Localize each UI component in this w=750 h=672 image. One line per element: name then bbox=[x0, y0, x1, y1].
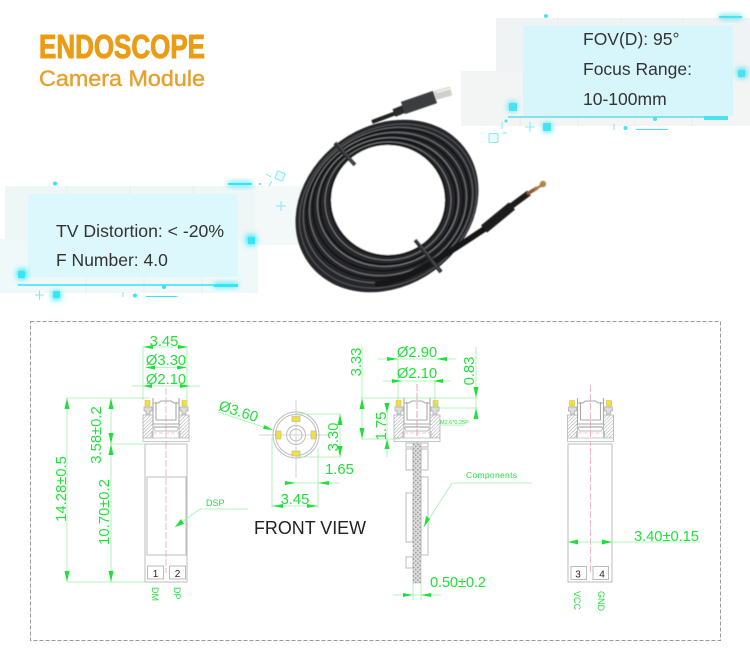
dim label 3.33: 3.33 bbox=[349, 348, 365, 376]
pad 4 bbox=[593, 566, 608, 580]
dim label 3.58: 3.58±0.2 bbox=[89, 406, 105, 464]
label DSP: DSP bbox=[206, 498, 225, 508]
label: FRONT VIEW: FRONT VIEW bbox=[254, 518, 366, 538]
pad 1: 1 bbox=[153, 569, 159, 580]
title: ENDOSCOPE: ENDOSCOPE bbox=[39, 28, 205, 65]
dim label Ø2.90: Ø2.90 bbox=[397, 345, 437, 361]
dim label 1.65: 1.65 bbox=[325, 462, 354, 478]
text: range value: 10-100mm bbox=[583, 89, 667, 109]
title bbox=[39, 28, 205, 91]
panel: lens specs right bbox=[461, 14, 750, 142]
dim label 3.45: 3.45 bbox=[281, 492, 309, 508]
drawing: PCB side view bbox=[349, 345, 532, 600]
dim label 3.30: 3.30 bbox=[326, 423, 342, 451]
text: F Number: F Number: 4.0 bbox=[56, 250, 168, 270]
label GND: GND bbox=[596, 591, 606, 612]
dim label 10.70: 10.70±0.2 bbox=[97, 479, 113, 545]
LEDs bbox=[276, 416, 316, 456]
pad 1 bbox=[148, 566, 164, 580]
pad 3: 3 bbox=[575, 570, 581, 580]
panel: dimension drawing frame bbox=[30, 322, 720, 640]
text: Focus Range: Focus Range: bbox=[583, 59, 692, 79]
subtitle: Camera Module: Camera Module bbox=[39, 66, 205, 91]
dim label Ø2.10: Ø2.10 bbox=[146, 372, 186, 388]
label DP: DP bbox=[172, 587, 182, 600]
drawing: right side view bbox=[568, 385, 700, 612]
drawing: left side view bbox=[54, 334, 248, 601]
dim label 0.50: 0.50±0.2 bbox=[430, 575, 486, 591]
pad 2: 2 bbox=[175, 569, 181, 580]
product image: cable coil bbox=[262, 84, 546, 328]
dim label 1.75: 1.75 bbox=[374, 412, 390, 440]
pad 4: 4 bbox=[599, 570, 605, 580]
pad 3 bbox=[571, 566, 586, 580]
pad 2 bbox=[170, 566, 186, 580]
label Components: Components bbox=[466, 470, 517, 480]
text: TV Distortion: TV Distortion: < -20% bbox=[56, 221, 224, 241]
dim label Ø3.30: Ø3.30 bbox=[146, 353, 186, 369]
dim label 3.45: 3.45 bbox=[150, 334, 178, 350]
dim label 14.28: 14.28±0.5 bbox=[54, 456, 70, 522]
label VCC: VCC bbox=[572, 591, 582, 611]
dim label Ø2.10: Ø2.10 bbox=[397, 366, 437, 382]
panel: lens specs left bbox=[0, 171, 305, 300]
thread label: M2.6*0.25P bbox=[440, 420, 469, 426]
text: FOV: FOV(D): 95° bbox=[583, 29, 679, 49]
dim label 0.83: 0.83 bbox=[462, 357, 478, 385]
drawing: front view bbox=[217, 398, 366, 538]
label DM: DM bbox=[150, 587, 160, 601]
dim label 3.40: 3.40±0.15 bbox=[634, 529, 699, 545]
dim label Ø3.60: Ø3.60 bbox=[217, 398, 260, 426]
